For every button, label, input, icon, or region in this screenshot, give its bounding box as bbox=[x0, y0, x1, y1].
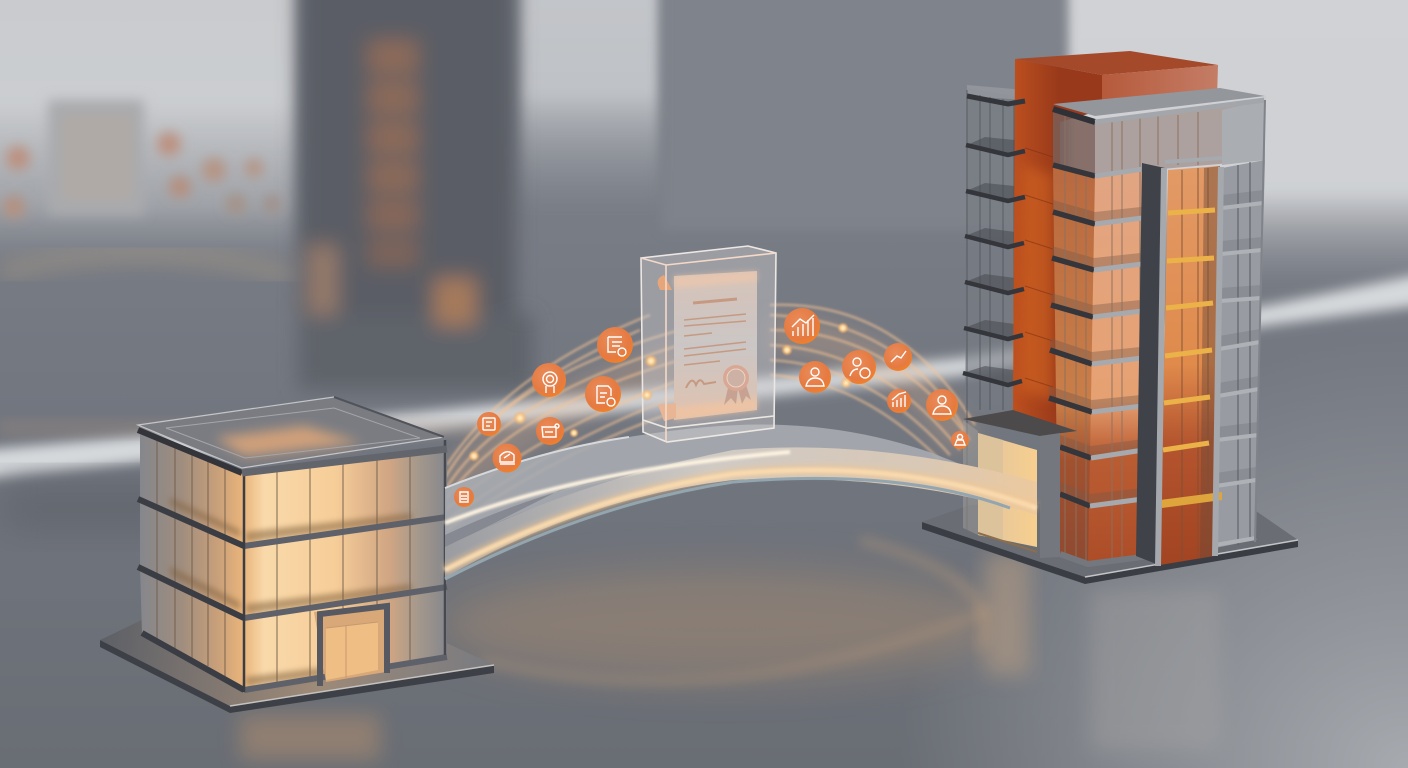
left wing floor plates bbox=[963, 137, 1025, 385]
building: small glass office bbox=[100, 397, 494, 713]
certificate signature bbox=[686, 380, 716, 388]
badge: medal bbox=[532, 363, 566, 397]
badge: person with seal bbox=[842, 350, 876, 384]
tower main wing glass bbox=[1049, 100, 1265, 566]
glass case edges bbox=[641, 246, 776, 442]
badge: gauge card bbox=[492, 444, 522, 472]
small building entrance bbox=[314, 604, 387, 686]
tower orange core bbox=[1013, 51, 1218, 430]
badge: mini chart bbox=[887, 389, 911, 413]
tower glass mullions bbox=[1065, 112, 1198, 563]
badge: document stack bbox=[597, 327, 633, 363]
tower left glass wing bbox=[963, 85, 1025, 530]
building: tall orange tower bbox=[922, 51, 1298, 584]
small building glowing right face bbox=[244, 450, 447, 690]
tower central bay with yellow balconies bbox=[1136, 158, 1222, 566]
badge: form bbox=[477, 412, 501, 436]
flow glow: right band bbox=[770, 335, 965, 445]
yellow balcony bars bbox=[1163, 210, 1215, 450]
tower dark column and frame bbox=[1136, 163, 1165, 565]
floor: warm reflections bbox=[240, 540, 1220, 760]
floor: lighter right side bbox=[900, 340, 1408, 768]
background: blurred distant tower bbox=[298, 0, 533, 390]
certificate paper bbox=[658, 271, 757, 421]
badge: person bbox=[799, 361, 831, 393]
bridge: curved glass ribbon bbox=[445, 424, 1037, 579]
tower roof plate bbox=[1053, 88, 1265, 122]
badge: document seal bbox=[585, 376, 621, 412]
flow glow: left band bbox=[447, 360, 680, 495]
badge: trend line bbox=[884, 343, 912, 371]
bridge front ribbon bbox=[445, 447, 1037, 578]
certificate seal bbox=[723, 365, 751, 405]
tower right glass wing bbox=[1215, 100, 1265, 548]
bridge back surface bbox=[445, 424, 965, 550]
glass case body bbox=[641, 246, 776, 442]
certificate text lines bbox=[684, 299, 746, 365]
badge: small document bbox=[454, 487, 474, 507]
sparks: small glowing dots bbox=[468, 322, 852, 462]
icons: orange credential badges right of certificate bbox=[784, 308, 969, 449]
badge: small person bbox=[951, 431, 969, 449]
small building base plate bbox=[100, 620, 494, 713]
small building glass left face bbox=[140, 432, 244, 690]
tower base plate bbox=[922, 500, 1298, 584]
badge: card bbox=[536, 417, 564, 445]
small building floor slabs bbox=[138, 440, 447, 692]
small building mullions bbox=[157, 439, 410, 686]
badge: person outline bbox=[926, 389, 958, 421]
tower left wing slabs bbox=[963, 96, 1025, 385]
flow lines: left arcs bbox=[445, 315, 680, 530]
main wing glass floor shadows bbox=[1049, 200, 1150, 504]
flow lines: right arcs bbox=[770, 305, 975, 460]
small building glass roof bbox=[138, 397, 447, 473]
tower podium with lit window bbox=[963, 410, 1077, 558]
background: bright horizon streak bbox=[0, 272, 1408, 480]
tower main wing slabs bbox=[1049, 165, 1150, 564]
interior shadows bbox=[170, 497, 412, 686]
icons: orange credential badges left of certificate bbox=[454, 327, 633, 507]
badge: bar chart bbox=[784, 308, 820, 344]
background: blurred distant building and dots bbox=[3, 100, 281, 218]
bridge glowing light line bbox=[445, 470, 1036, 570]
certificate: glass case with document bbox=[641, 246, 776, 442]
